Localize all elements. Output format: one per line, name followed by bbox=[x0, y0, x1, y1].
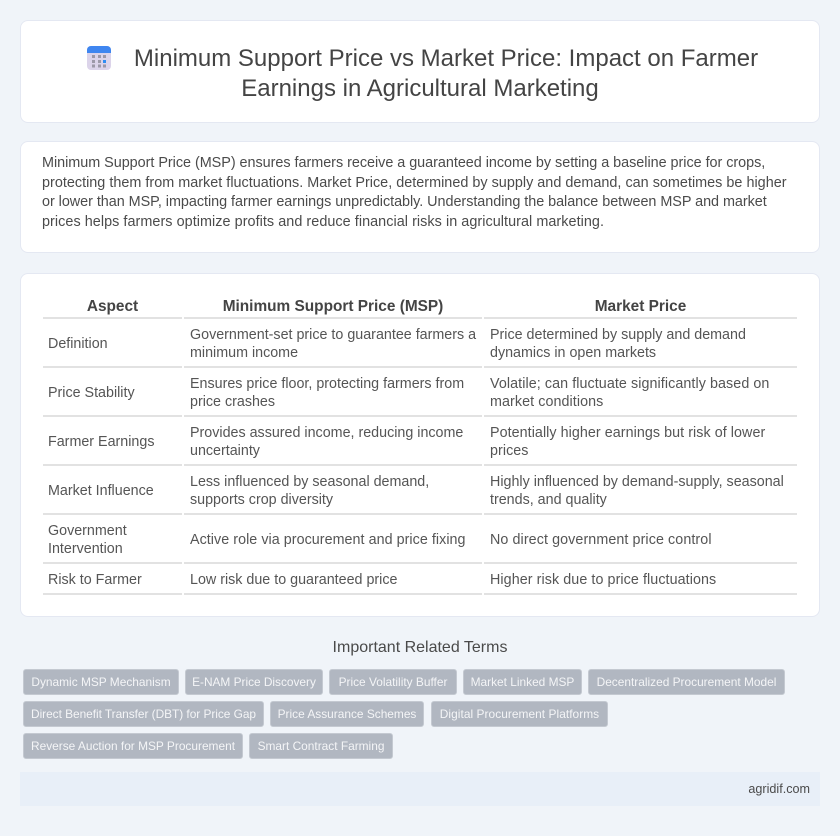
chip: Price Assurance Schemes bbox=[278, 707, 416, 721]
row: farmer earnings: Potentially higher earnings but risk of lower bbox=[490, 425, 765, 441]
row: farmer earnings bbox=[48, 425, 766, 459]
title: Earnings in Agricultural Marketing bbox=[241, 74, 599, 102]
row: government intervention: No direct government price control bbox=[490, 532, 712, 548]
chip bbox=[185, 669, 323, 695]
row: definition: Government-set price to guarantee farmers a bbox=[190, 327, 476, 343]
chip bbox=[23, 669, 179, 695]
row: definition bbox=[48, 327, 746, 361]
intro paragraph: prices helps farmers optimize profits and reduce financial risks in agricultural marketing. bbox=[42, 214, 604, 230]
row: farmer earnings: Farmer Earnings bbox=[48, 434, 154, 450]
row: price stability: market conditions bbox=[490, 394, 603, 410]
row: market influence: Highly influenced by demand-supply, seasonal bbox=[490, 474, 784, 490]
chip bbox=[329, 669, 457, 695]
row: price stability: Price Stability bbox=[48, 385, 135, 401]
row: government intervention: Active role via procurement and price fixing bbox=[190, 532, 466, 548]
comparison table bbox=[43, 298, 797, 595]
row: market influence: supports crop diversity bbox=[190, 492, 333, 508]
title bbox=[134, 45, 758, 102]
chip bbox=[23, 701, 264, 727]
row: farmer earnings: uncertainty bbox=[190, 443, 260, 459]
row: price stability: price crashes bbox=[190, 394, 275, 410]
chip: Reverse Auction for MSP Procurement bbox=[31, 739, 235, 753]
chip bbox=[249, 733, 393, 759]
row: market influence: trends, and quality bbox=[490, 492, 607, 508]
chip bbox=[463, 669, 582, 695]
table header: Market Price bbox=[595, 298, 686, 315]
intro paragraph: Minimum Support Price (MSP) ensures farmers receive a guaranteed income by setting a baseline price for crops, bbox=[42, 155, 765, 171]
chip: Market Linked MSP bbox=[471, 675, 574, 689]
row: definition: Definition bbox=[48, 336, 108, 352]
panel: header bbox=[20, 20, 820, 123]
row: risk to farmer: Risk to Farmer bbox=[48, 572, 142, 588]
row: government intervention: Intervention bbox=[48, 541, 123, 557]
row: definition: Price determined by supply and demand bbox=[490, 327, 746, 343]
panel: intro text bbox=[20, 141, 820, 253]
row: definition: minimum income bbox=[190, 345, 298, 361]
table header bbox=[87, 298, 686, 315]
title: Minimum Support Price vs Market Price: Impact on Farmer bbox=[134, 45, 758, 72]
chip: Decentralized Procurement Model bbox=[597, 675, 776, 689]
chip bbox=[588, 669, 785, 695]
chip: Dynamic MSP Mechanism bbox=[31, 675, 171, 689]
footer bar bbox=[20, 772, 820, 806]
table header: Aspect bbox=[87, 298, 138, 315]
row: price stability: Volatile; can fluctuate significantly based on bbox=[490, 376, 769, 392]
footer source text: agridif.com bbox=[748, 782, 810, 796]
intro paragraph: protecting them from market fluctuations. Market Price, determined by supply and demand, can sometimes be higher bbox=[42, 174, 787, 190]
chip: Digital Procurement Platforms bbox=[440, 707, 599, 721]
row: market influence: Less influenced by seasonal demand, bbox=[190, 474, 429, 490]
row: market influence: Market Influence bbox=[48, 483, 154, 499]
heading: related terms: Important Related Terms bbox=[333, 639, 507, 656]
chip: Direct Benefit Transfer (DBT) for Price Gap bbox=[31, 707, 256, 721]
chip: Smart Contract Farming bbox=[258, 739, 384, 753]
row: price stability bbox=[48, 376, 769, 410]
icon: calendar bbox=[87, 46, 111, 70]
row: government intervention bbox=[48, 523, 712, 557]
chip: E-NAM Price Discovery bbox=[192, 675, 316, 689]
row: price stability: Ensures price floor, protecting farmers from bbox=[190, 376, 464, 392]
chip bbox=[23, 733, 243, 759]
related term chips bbox=[23, 669, 785, 759]
intro paragraph bbox=[42, 155, 787, 230]
table header: Minimum Support Price (MSP) bbox=[223, 298, 443, 315]
row: risk to farmer: Low risk due to guaranteed price bbox=[190, 572, 397, 588]
row: definition: dynamics in open markets bbox=[490, 345, 656, 361]
intro paragraph: or lower than MSP, impacting farmer earnings unpredictably. Understanding the balance between MSP and market bbox=[42, 194, 767, 210]
chip bbox=[270, 701, 424, 727]
row: farmer earnings: Provides assured income, reducing income bbox=[190, 425, 463, 441]
row: market influence bbox=[48, 474, 784, 508]
chip: Price Volatility Buffer bbox=[339, 675, 447, 689]
row: risk to farmer bbox=[48, 572, 716, 588]
row: farmer earnings: prices bbox=[490, 443, 528, 459]
row: risk to farmer: Higher risk due to price fluctuations bbox=[490, 572, 716, 588]
chip bbox=[431, 701, 608, 727]
panel: comparison table bbox=[20, 273, 820, 617]
row: government intervention: Government bbox=[48, 523, 127, 539]
